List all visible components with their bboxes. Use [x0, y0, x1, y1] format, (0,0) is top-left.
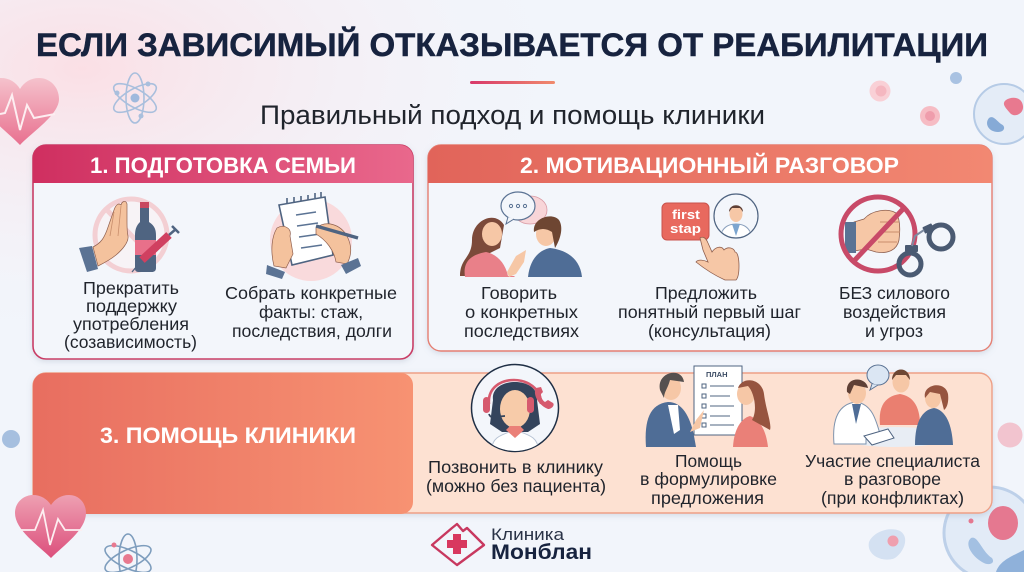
icon: cells top right — [870, 72, 1024, 144]
text: collect facts: последствия, долги — [232, 321, 392, 341]
panel: 2. motivational talk — [428, 145, 992, 351]
icon: call operator — [472, 364, 558, 452]
text: help wording — [640, 451, 777, 508]
accent line — [470, 81, 555, 84]
logo: Клиника Монблан: Клиника — [491, 525, 565, 544]
text: specialist in conversation: в разговоре — [844, 469, 941, 489]
text: stop supporting use: поддержку — [86, 296, 177, 316]
text: specialist in conversation: Участие специалиста — [805, 451, 980, 471]
text: stop supporting use: Прекратить — [83, 278, 179, 298]
text: offer first step: Предложить — [655, 283, 757, 303]
text: talk about consequences: о конкретных — [465, 302, 578, 322]
text: specialist in conversation — [805, 451, 980, 508]
text: collect facts — [225, 283, 397, 341]
text: offer first step: понятный первый шаг — [618, 302, 801, 322]
logo: Клиника Монблан: Монблан — [491, 541, 592, 564]
panel: 1. family preparation — [33, 145, 413, 359]
icon: cells and atom bottom — [2, 422, 1024, 572]
text: stop supporting use: употребления — [73, 314, 189, 334]
panel header 1: 1. ПОДГОТОВКА СЕМЬИ — [90, 153, 356, 178]
text: offer first step: (консультация) — [648, 321, 771, 341]
text: offer first step — [618, 283, 801, 341]
icon: no force, fist and handcuffs — [841, 197, 953, 275]
left block with heading: 3. ПОМОЩЬ КЛИНИКИ — [100, 423, 356, 448]
text: help wording: в формулировке — [640, 469, 777, 489]
text: call clinic: (можно без пациента) — [426, 476, 606, 496]
icon: specialist with family — [834, 365, 953, 447]
logo mark — [432, 524, 484, 565]
text: no force: БЕЗ силового — [839, 283, 950, 303]
title: ЕСЛИ ЗАВИСИМЫЙ ОТКАЗЫВАЕТСЯ ОТ РЕАБИЛИТАЦИИ — [36, 27, 988, 63]
icon: plan consultation: ПЛАН — [706, 370, 728, 379]
panel header 2: 2. МОТИВАЦИОННЫЙ РАЗГОВОР — [520, 153, 899, 178]
text: no force — [839, 283, 950, 341]
text: stop supporting use: (созависимость) — [64, 332, 197, 352]
panel: 3. clinic help — [33, 364, 992, 514]
icon: heart top left — [0, 78, 59, 145]
text: no force: воздействия — [843, 302, 946, 322]
icon: atom top — [110, 73, 160, 123]
icon: plan consultation — [646, 366, 770, 447]
text: collect facts: Собрать конкретные — [225, 283, 397, 303]
icon: first step button and doctor: first — [672, 207, 701, 222]
text: specialist in conversation: (при конфликтах) — [821, 488, 964, 508]
text: call clinic — [426, 457, 606, 496]
text: help wording: предложения — [651, 488, 764, 508]
subtitle: Правильный подход и помощь клиники — [260, 100, 765, 130]
panel header 1 — [33, 145, 413, 183]
text: talk about consequences — [464, 283, 579, 341]
text: stop supporting use — [64, 278, 197, 352]
panel header 2 — [428, 145, 992, 183]
icon: two people talking — [460, 192, 582, 277]
text: talk about consequences: последствиях — [464, 321, 579, 341]
icon: heart bottom left — [15, 495, 86, 558]
left block with heading — [33, 373, 413, 514]
icon: first step button and doctor: stap — [670, 221, 701, 236]
icon: first step button and doctor — [662, 194, 758, 280]
text: no force: и угроз — [865, 321, 923, 341]
icon: notepad with hands — [266, 192, 361, 281]
text: help wording: Помощь — [675, 451, 742, 471]
text: call clinic: Позвонить в клинику — [428, 457, 603, 477]
logo: Клиника Монблан — [432, 524, 592, 565]
icon: hand stop, bottle and syringe — [79, 199, 179, 272]
text: collect facts: факты: стаж, — [259, 302, 363, 322]
text: talk about consequences: Говорить — [481, 283, 557, 303]
